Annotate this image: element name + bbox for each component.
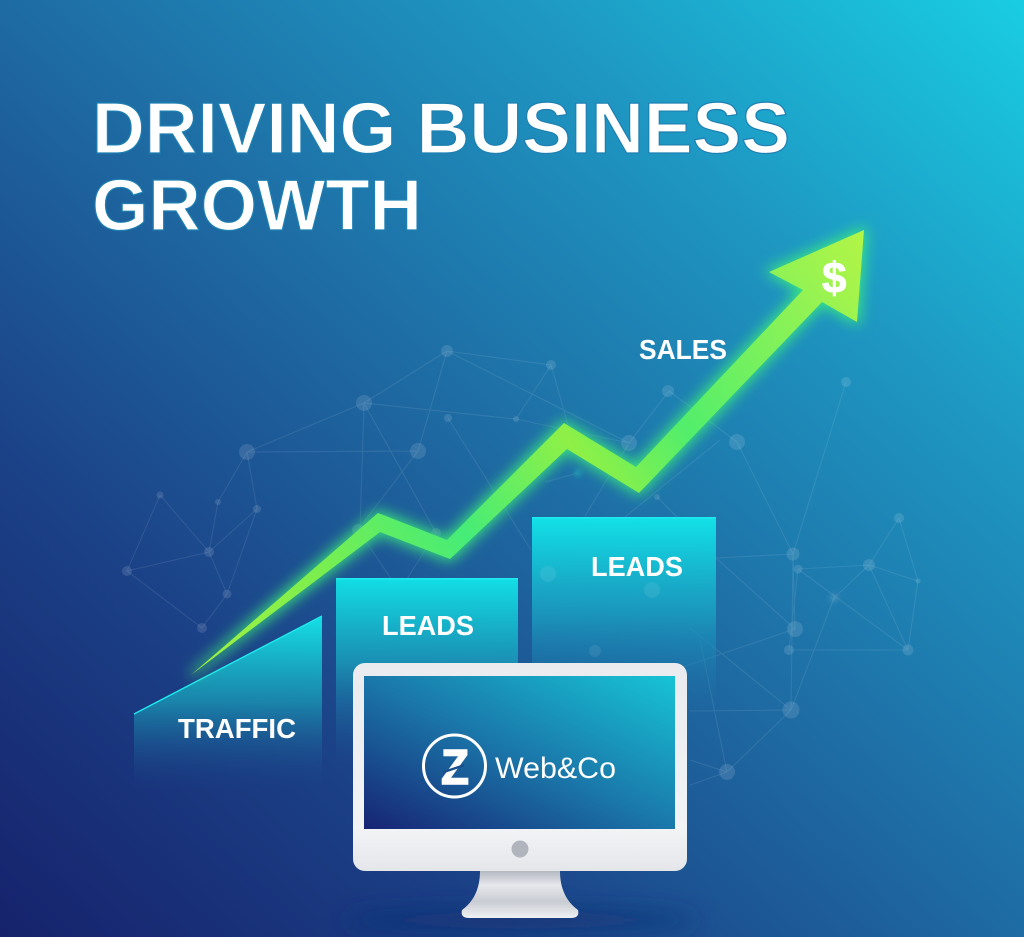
logo: Web&Co: [495, 752, 616, 785]
monitor stand: [462, 871, 578, 918]
bar: leads (first): LEADS: [382, 610, 474, 641]
logo: [424, 735, 616, 797]
bar: leads (second): LEADS: [591, 551, 683, 582]
monitor screen: [364, 676, 675, 829]
title: DRIVING BUSINESS: [92, 88, 790, 169]
sales label: SALES: [639, 334, 727, 365]
monitor shadow: [340, 910, 700, 930]
title: GROWTH: [92, 165, 422, 246]
monitor: [353, 663, 687, 918]
monitor body: [353, 663, 687, 871]
bar: traffic: [134, 616, 322, 790]
bar: leads (first): [336, 578, 518, 770]
logo: Z: [441, 741, 469, 795]
power button: [512, 840, 528, 858]
bar: traffic: TRAFFIC: [178, 713, 296, 744]
network constellation background: [122, 345, 920, 785]
dollar sign: $: [822, 254, 846, 303]
bar: leads (second): [532, 517, 716, 715]
title: [92, 88, 790, 246]
